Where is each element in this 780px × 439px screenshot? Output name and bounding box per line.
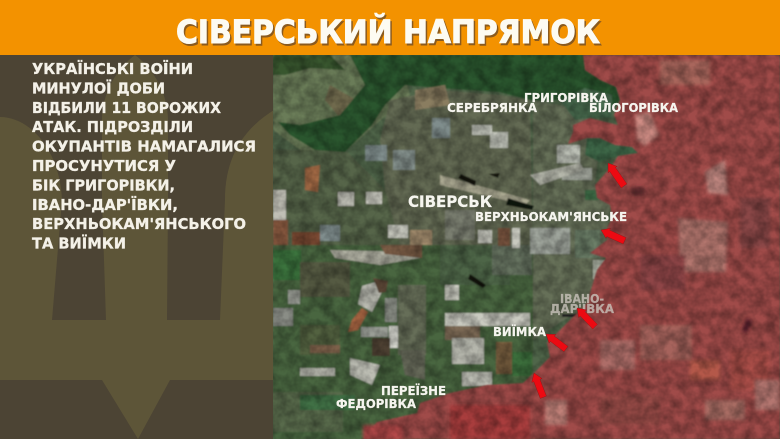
text block: summary: ВЕРХНЬОКАМ'ЯНСЬКОГО: [32, 215, 246, 233]
title: СІВЕРСЬКИЙ НАПРЯМОК: [176, 13, 600, 51]
arrow: Vyimka direction: [543, 330, 569, 353]
label: Виїмка: ВИЇМКА: [493, 324, 547, 339]
text block: summary: ПРОСУНУТИСЯ У: [32, 157, 176, 175]
label: Федорівка: ФЕДОРІВКА: [336, 397, 417, 411]
title banner: [0, 0, 780, 55]
arrow: Ivano-Darivka direction: [573, 304, 599, 331]
title: СІВЕРСЬКИЙ НАПРЯМОК: [178, 15, 602, 53]
text block: summary: [32, 59, 256, 253]
label: Івано-Дар'ївка: ДАР'ЇВКА: [550, 301, 615, 316]
label: Івано-Дар'ївка: ІВАНО-: [560, 292, 604, 306]
text block: summary: МИНУЛОЇ ДОБИ: [32, 78, 165, 97]
label: Білогорівка: БІЛОГОРІВКА: [589, 101, 679, 115]
label: Івано-Дар'ївка: [550, 292, 615, 316]
map labels: [336, 91, 679, 411]
lower fields: [273, 245, 533, 439]
forest: [278, 55, 620, 152]
text block: summary: ТА ВИЇМКИ: [32, 234, 126, 253]
occupied territory overlay: [363, 55, 780, 439]
arrow: Hryhorivka direction: [603, 160, 629, 189]
overlay field patches: [363, 60, 780, 439]
arrow: Verkhnokamianske direction: [599, 225, 627, 246]
text block: summary: БІК ГРИГОРІВКИ,: [32, 176, 175, 194]
label: Верхньокам'янське: ВЕРХНЬОКАМ'ЯНСЬКЕ: [475, 210, 627, 224]
terrain patches: [273, 55, 638, 439]
dark ponds: [458, 174, 476, 186]
panel: left text panel: [0, 55, 274, 439]
text block: summary: ОКУПАНТІВ НАМАГАЛИСЯ: [32, 138, 256, 156]
label: Григорівка: ГРИГОРІВКА: [524, 91, 609, 105]
arrows: [529, 160, 629, 399]
map texture: [273, 55, 780, 439]
panel: satellite map: [273, 55, 780, 439]
label: Переїзне: ПЕРЕЇЗНЕ: [381, 383, 446, 398]
text block: summary: ІВАНО-ДАР'ЇВКИ,: [32, 195, 178, 214]
arrow: Pereizne direction: [529, 371, 548, 399]
upper fields: [305, 165, 320, 192]
label: Серебрянка: СЕРЕБРЯНКА: [447, 101, 538, 115]
label: Сіверськ: СІВЕРСЬК: [408, 192, 492, 211]
text block: summary: АТАК. ПІДРОЗДІЛИ: [32, 118, 193, 136]
icon: trident watermark: [0, 55, 274, 439]
text block: summary: ВІДБИЛИ 11 ВОРОЖИХ: [32, 99, 221, 117]
text block: summary: УКРАЇНСЬКІ ВОЇНИ: [32, 59, 193, 78]
